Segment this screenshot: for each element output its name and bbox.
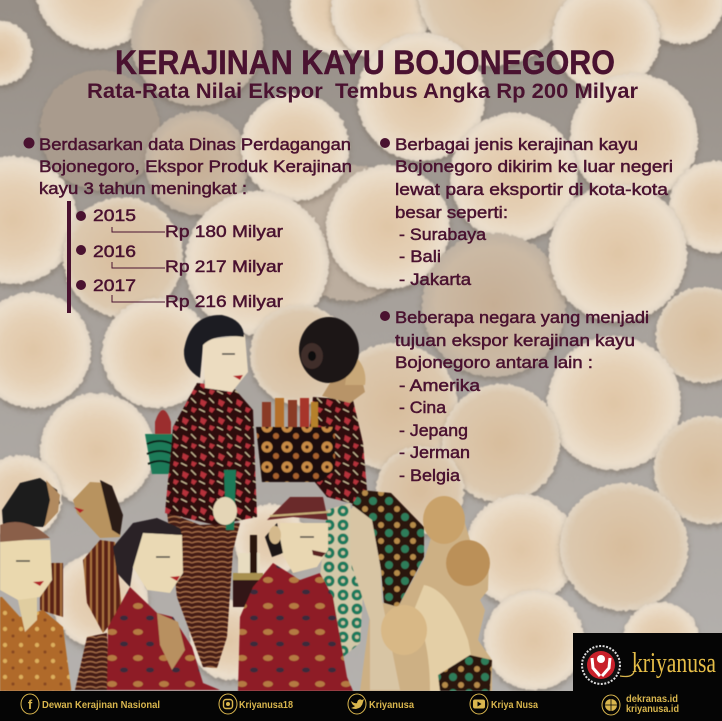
statue: seated woman in red: [107, 518, 220, 690]
text block: destination countries: [380, 308, 649, 485]
statue: cream figure with batik cloth: [350, 490, 492, 691]
title: KERAJINAN KAYU BOJONEGORO: [115, 44, 615, 82]
website: kriyanusa.id: [626, 704, 679, 715]
text block: destination countries: - Jepang: [399, 421, 468, 440]
year 2017: [76, 276, 283, 311]
text block: destination countries: - Belgia: [399, 466, 461, 485]
year 2015: 2015: [93, 206, 136, 225]
subtitle: Rata-Rata Nilai Ekspor Tembus Angka Rp 200 Milyar: [87, 79, 639, 103]
instagram: Kriyanusa18: [239, 700, 293, 711]
text block: export data intro: Bojonegoro, Ekspor Produk Kerajinan: [39, 157, 352, 176]
logo panel: kriyanusa: [573, 633, 722, 693]
year 2016: 2016: [93, 242, 136, 261]
text block: destination countries: tujuan ekspor kerajinan kayu: [395, 331, 635, 350]
statue: standing woman: [145, 315, 263, 668]
facebook: [21, 694, 160, 714]
text block: exporter cities: lewat para eksportir di kota-kota: [395, 180, 669, 199]
website: [602, 694, 679, 715]
text block: exporter cities: Bojonegoro dikirim ke luar negeri: [395, 157, 673, 176]
youtube: [470, 694, 538, 714]
illustration: carved wooden statues: [0, 315, 492, 691]
year 2017: Rp 216 Milyar: [165, 292, 283, 311]
facebook: Dewan Kerajinan Nasional: [42, 700, 160, 711]
text block: export data intro: kayu 3 tahun meningkat :: [39, 179, 247, 198]
text block: exporter cities: besar seperti:: [395, 203, 508, 222]
statue: back-left man: [73, 480, 123, 690]
year 2015: Rp 180 Milyar: [165, 222, 283, 241]
text block: destination countries: - Cina: [399, 398, 447, 417]
icon: dekranas emblem: [582, 646, 620, 684]
text block: destination countries: - Jerman: [399, 443, 470, 462]
timeline: export value per year: [67, 201, 283, 313]
text block: exporter cities: - Bali: [399, 247, 441, 266]
year 2017: 2017: [93, 276, 136, 295]
instagram: [219, 694, 293, 714]
youtube: Kriya Nusa: [491, 700, 538, 711]
statue: seated woman in orange: [0, 522, 71, 691]
footer bar: social links: [0, 691, 722, 721]
year 2015: [76, 206, 283, 241]
text block: export data intro: [24, 135, 352, 198]
website: dekranas.id: [626, 694, 678, 705]
statue: woman carrying tray (back view): [256, 317, 367, 657]
statue: back-left woman: [2, 478, 63, 617]
text block: exporter cities: [380, 135, 673, 289]
facebook: f: [28, 697, 33, 712]
text block: exporter cities: - Surabaya: [399, 225, 487, 244]
text block: exporter cities: Berbagai jenis kerajinan kayu: [395, 135, 638, 154]
year 2016: [76, 242, 283, 276]
twitter: [348, 694, 414, 714]
text block: destination countries: Bojonegoro antara lain :: [395, 353, 593, 372]
statue: seated man in red: [238, 497, 353, 691]
text block: exporter cities: - Jakarta: [399, 270, 472, 289]
year 2016: Rp 217 Milyar: [165, 257, 283, 276]
text block: destination countries: Beberapa negara yang menjadi: [395, 308, 649, 327]
text block: export data intro: Berdasarkan data Dinas Perdagangan: [39, 135, 351, 154]
twitter: Kriyanusa: [369, 700, 414, 711]
text block: destination countries: - Amerika: [399, 376, 481, 395]
